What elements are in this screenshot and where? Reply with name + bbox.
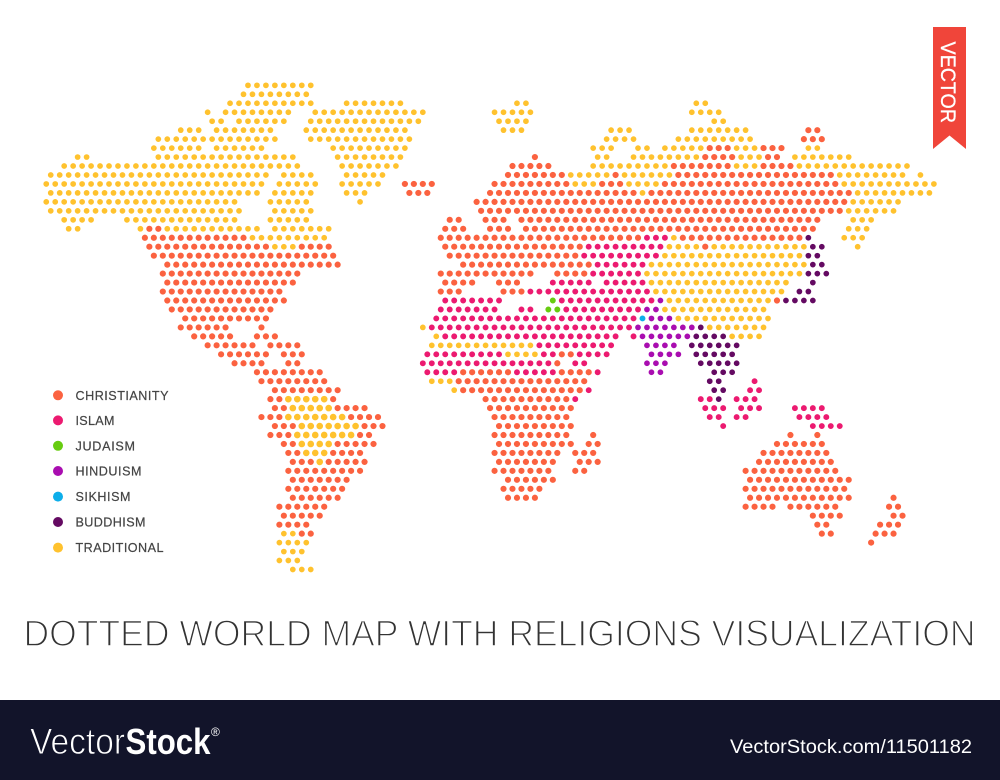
dots: hinduism xyxy=(638,301,692,372)
legend item: islam: ISLAM xyxy=(76,414,114,428)
image id: VectorStock.com/11501182 xyxy=(730,736,972,758)
legend item: traditional: TRADITIONAL xyxy=(76,541,164,555)
legend xyxy=(53,389,169,555)
dots: christianity xyxy=(145,130,903,543)
dotted world map xyxy=(46,85,934,569)
dots: traditional in south america xyxy=(288,399,356,462)
footer banner xyxy=(0,700,1000,780)
dots: judaism xyxy=(548,301,557,309)
logo: vectorstock xyxy=(30,721,220,762)
legend item: judaism: JUDAISM xyxy=(76,439,135,453)
ribbon: vector xyxy=(933,27,966,149)
logo: vectorstock: Vector xyxy=(30,721,125,762)
legend item: islam xyxy=(53,414,114,428)
dots: traditional xyxy=(46,85,934,569)
legend item: buddhism: BUDDHISM xyxy=(76,516,146,530)
logo: vectorstock: ® xyxy=(211,725,220,739)
logo: vectorstock: Stock xyxy=(126,721,211,762)
ribbon: vector: VECTOR xyxy=(936,42,960,123)
dots: sikhism xyxy=(641,317,644,319)
legend item: hinduism: HINDUISM xyxy=(76,465,142,479)
dots: islam xyxy=(423,238,840,426)
legend item: christianity: CHRISTIANITY xyxy=(76,389,169,403)
dots: buddhism xyxy=(692,238,826,399)
legend item: sikhism: SIKHISM xyxy=(76,490,130,504)
title: DOTTED WORLD MAP WITH RELIGIONS VISUALIZATION xyxy=(24,613,976,654)
